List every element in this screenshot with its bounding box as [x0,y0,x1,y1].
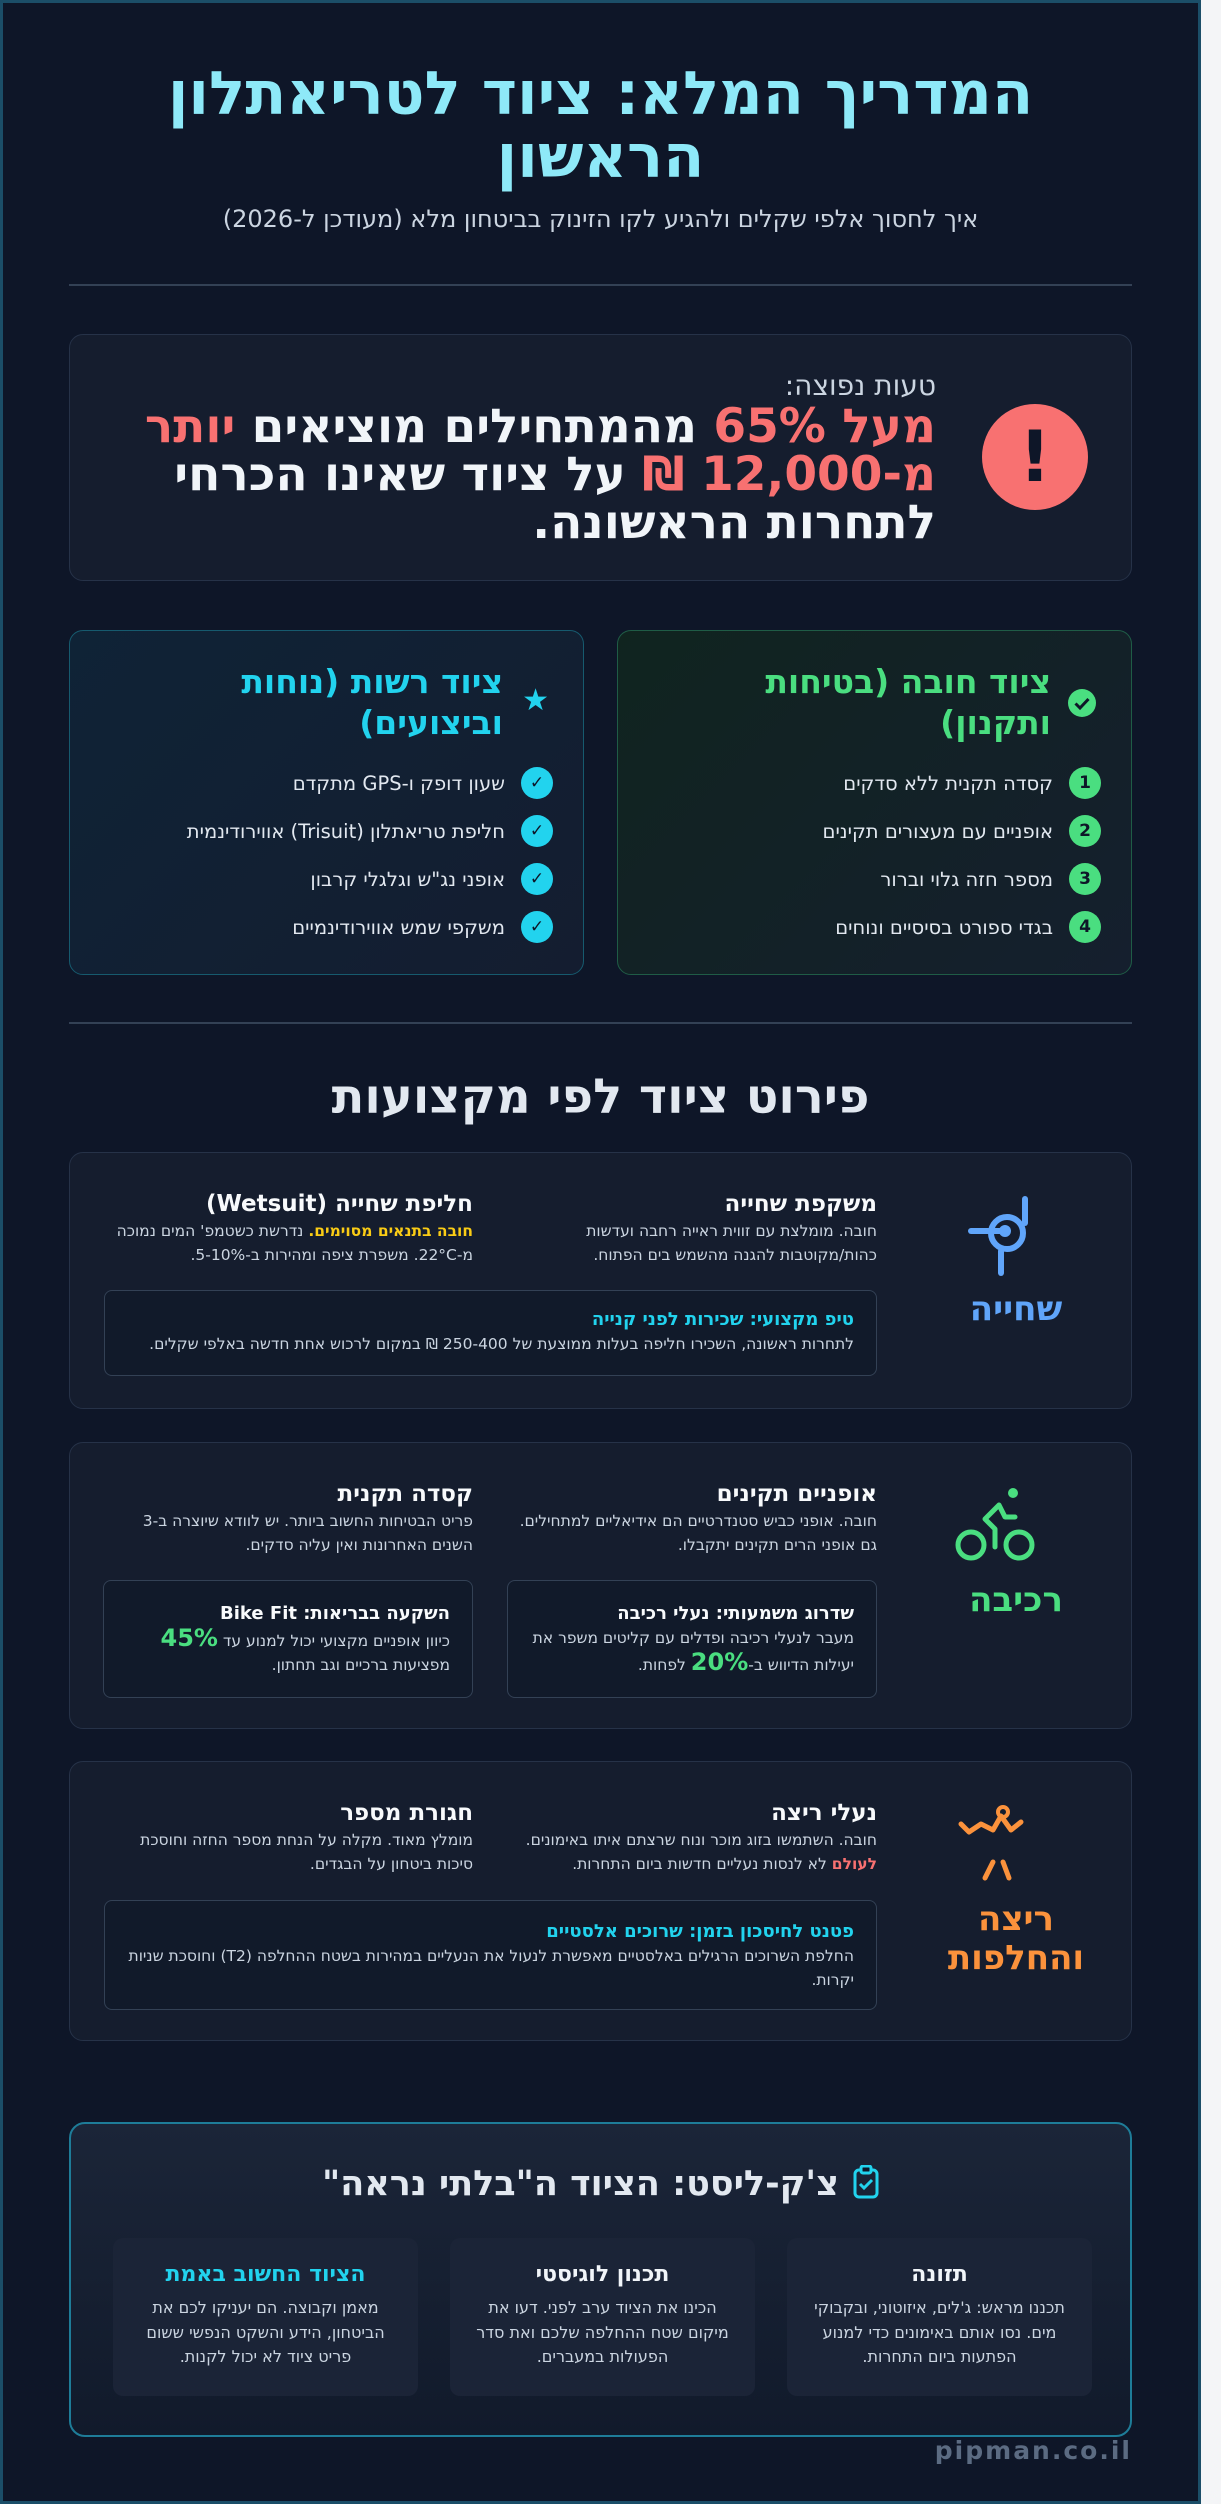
list: mandatory items: מספר חזה גלוי וברור [880,868,1053,890]
heading: mandatory: ציוד חובה (בטיחות ותקנון) [765,662,1051,742]
list: optional items: משקפי שמש אווירודינמיים [292,916,505,938]
card: real gear: מאמן וקבוצה. הם יעניקו לכם את הביטחון, הידע והשקט הנפשי ששום פריט ציוד לא יכול לקנות. [146,2298,385,2366]
section heading: פירוט ציוד לפי מקצועות [332,1069,869,1125]
item: helmet: קסדה תקנית [338,1481,473,1507]
title: המדריך המלא: ציוד לטריאתלון [168,59,1033,129]
panel: checklist [69,2122,1132,2437]
list: optional items [186,767,553,943]
list: mandatory items: 2 [1079,821,1091,841]
label: run [948,1899,1084,1978]
list: optional items: ✓ [530,773,544,793]
item: running shoes [526,1800,877,1873]
icon: exclamation: ! [1019,416,1051,498]
tip box: bike fit: השקעה בבריאות: Bike Fit [220,1603,450,1624]
list: mandatory items: קסדה תקנית ללא סדקים [843,772,1053,794]
list: optional items: אופני נג"ש וגלגלי קרבון [310,868,505,890]
card: nutrition: תזונה [911,2262,968,2287]
icon: cyclist [956,1488,1034,1560]
item: bicycle [520,1481,877,1554]
card: logistics: הכינו את הציוד ערב לפני. דעו את מיקום שטח ההחלפה שלכם ואת סדר הפעולות במעברים. [476,2298,729,2366]
icon: star: ★ [522,683,549,718]
tip box: elastic laces: החלפת השרוכים הרגילים באלסטיים מאפשרת לנעול את הנעליים במהירות בשטח ההחלפה (T2) וחוסכת שניות יקרות. [129,1947,854,1989]
list: mandatory items: בגדי ספורט בסיסיים ונוחים [835,916,1053,938]
tip box: bike fit: כיוון אופניים מקצועי יכול למנוע עד 45% מפציעות ברכיים וגב תחתון. [161,1624,450,1674]
icon: check circle [1068,689,1096,717]
item: goggles: משקפת שחייה [725,1191,877,1217]
tip box: cycling shoes: שדרוג משמעותי: נעלי רכיבה [617,1603,854,1624]
list: optional items: ✓ [530,917,544,937]
list: optional items: ✓ [530,821,544,841]
list: mandatory items: 3 [1079,869,1091,889]
item: helmet: פריט הבטיחות החשוב ביותר. יש לוודא שיוצרה ב-3 השנים האחרונות ואין עליה סדקים. [143,1512,473,1554]
panel: alert common mistake [69,334,1132,581]
item: bicycle: חובה. אופני כביש סטנדרטיים הם אידיאליים למתחילים. גם אופני הרים תקינים יתקבלו. [520,1512,877,1554]
panel: bike [69,1442,1132,1729]
label: run: והחלפות [948,1938,1084,1978]
list: mandatory items [822,767,1101,943]
item: race belt [140,1800,473,1873]
icon: clipboard [854,2165,878,2198]
list: optional items: חליפת טריאתלון (Trisuit) אווירודינמית [187,820,505,842]
checklist heading: צ'ק-ליסט: הציוד ה"בלתי נראה" [322,2164,839,2204]
tip box: cycling shoes [507,1580,877,1698]
label: swim: שחייה [970,1289,1062,1329]
list: mandatory items: 1 [1079,773,1091,793]
panel: mandatory gear [617,630,1132,975]
list: mandatory items: 4 [1079,917,1091,937]
item: running shoes: חובה. השתמשו בזוג מוכר ונוח שרצתם איתו באימונים. לעולם לא לנסות נעליים חדשות ביום התחרות. [526,1831,877,1873]
icon: exclamation [982,404,1088,510]
title: הראשון [497,122,704,192]
item: wetsuit: חובה בתנאים מסוימים. נדרשת כשטמפ' המים נמוכה מ-22°C. משפרת ציפה ומהירות ב-5-10%. [117,1222,473,1264]
item: bicycle: אופניים תקינים [717,1481,877,1507]
item: goggles [586,1191,877,1264]
label: run: ריצה [978,1899,1054,1939]
label: bike: רכיבה [969,1580,1063,1620]
card: nutrition [787,2238,1092,2396]
list: optional items: שעון דופק ו-GPS מתקדם [293,772,505,794]
card: real gear [113,2238,418,2396]
card: logistics: תכנון לוגיסטי [536,2262,669,2287]
icon: runner [958,1805,1024,1880]
heading: optional: ציוד רשות (נוחות וביצועים) [241,662,503,742]
list: mandatory items: אופניים עם מעצורים תקינים [822,820,1053,842]
card: logistics [450,2238,755,2396]
footer brand: pipman.co.il [935,2436,1132,2465]
icon: swimmer [968,1196,1028,1276]
tip box: rent: לתחרות ראשונה, השכירו חליפה בעלות ממוצעת של 250-400 ₪ במקום לרכוש אחת חדשה באלפי שקלים. [149,1335,854,1353]
tip box: rent: טיפ מקצועי: שכירות לפני קנייה [592,1309,854,1330]
tip box: elastic laces: פטנט לחיסכון בזמן: שרוכים אלסטיים [546,1921,854,1942]
item: goggles: חובה. מומלצת עם זווית ראייה רחבה ועדשות כהות/מקוטבות להגנה מהשמש בים הפתוח. [586,1222,877,1264]
title [168,59,1033,192]
card: nutrition: תכננו מראש: ג'לים, איזוטוני, ובקבוקי מים. נסו אותם באימונים כדי למנוע הפתעות ביום התחרות. [814,2298,1065,2366]
list: optional items: ✓ [530,869,544,889]
item: wetsuit [117,1191,473,1264]
tip box: rent [104,1290,877,1376]
tip box: cycling shoes: מעבר לנעלי רכיבה ופדלים עם קליטים משפר את יעילות הדיווש ב-20% לפחות. [533,1629,854,1676]
tip box: elastic laces [104,1900,877,2010]
item: wetsuit: חליפת שחייה (Wetsuit) [206,1191,473,1217]
alert text: מעל 65% מהמתחילים מוציאים יותר מ-12,000 ₪ על ציוד שאינו הכרחי לתחרות הראשונה. [145,399,936,550]
tip box: bike fit [103,1580,473,1698]
item: running shoes: נעלי ריצה [771,1800,877,1826]
panel: run and transitions [69,1761,1132,2041]
item: helmet [143,1481,473,1554]
subtitle: איך לחסוך אלפי שקלים ולהגיע לקו הזינוק בביטחון מלא (מעודכן ל-2026) [223,205,978,233]
item: race belt: מומלץ מאוד. מקלה על הנחת מספר החזה וחוסכת סיכות ביטחון על הבגדים. [140,1831,473,1873]
panel: swim [69,1152,1132,1409]
item: race belt: חגורת מספר [340,1800,473,1826]
alert text: טעות נפוצה: [785,369,936,402]
panel: optional gear [69,630,584,975]
card: real gear: הציוד החשוב באמת [165,2262,366,2287]
